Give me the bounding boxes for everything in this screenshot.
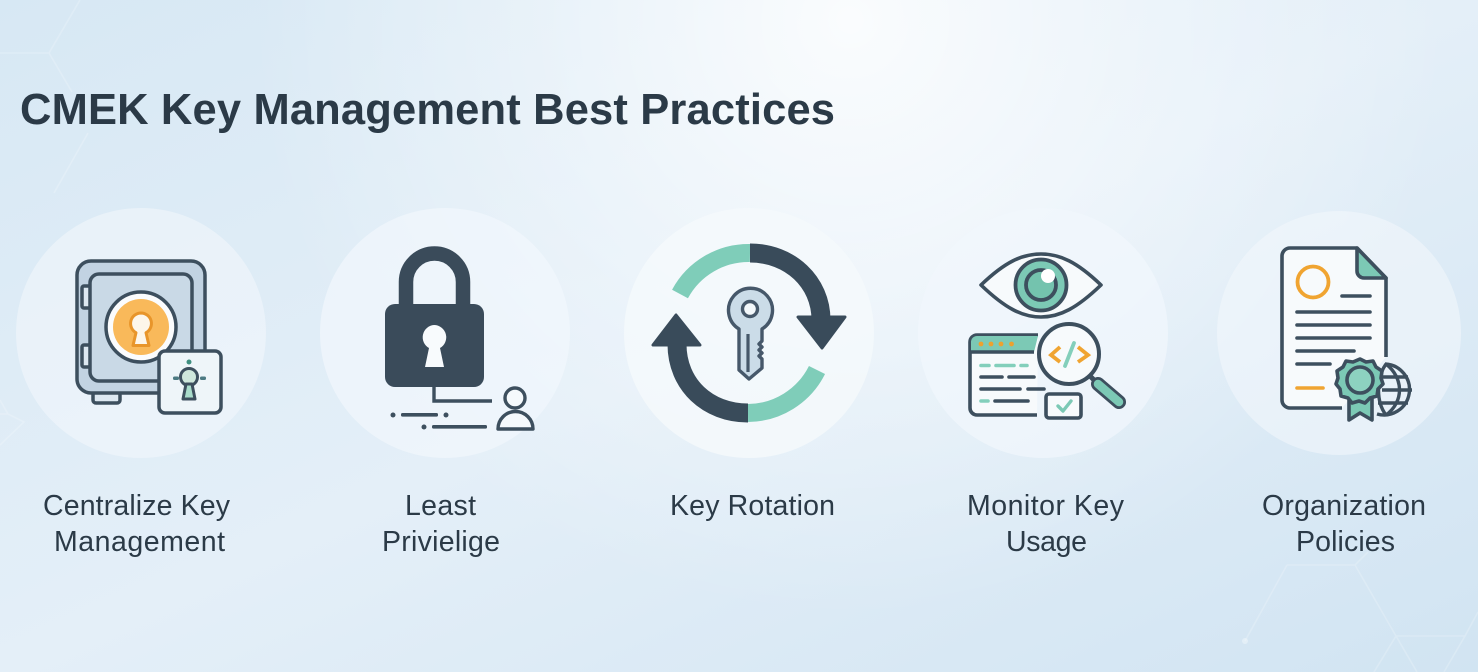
icon circle 3 — [624, 208, 874, 458]
icon: certificate badge — [1336, 359, 1383, 420]
icon: globe — [1377, 364, 1412, 415]
icon: safe with keyhole — [77, 261, 221, 413]
icon: rotation arrows with key — [653, 253, 845, 413]
icon: eye — [981, 254, 1101, 317]
panel: key rotation — [624, 208, 874, 522]
label — [967, 490, 1125, 558]
label: Least — [405, 490, 476, 522]
icon: code window — [970, 335, 1044, 415]
label: Privielige — [382, 526, 500, 558]
label: Management — [54, 526, 225, 558]
label: Centralize Key — [43, 490, 231, 522]
label: Key Rotation — [670, 490, 835, 522]
icon circle 5 — [1217, 211, 1461, 455]
label — [43, 490, 231, 558]
panel: centralize key management — [16, 208, 266, 558]
label: Policies — [1296, 526, 1395, 558]
icon circle 2 — [320, 208, 570, 458]
label: Monitor Key — [967, 490, 1125, 522]
icon: padlock with user — [385, 254, 533, 430]
panel: least privilege — [320, 208, 570, 558]
icon: check box — [1046, 394, 1081, 418]
icon circle 1 — [16, 208, 266, 458]
title: CMEK Key Management Best Practices — [20, 86, 835, 134]
icon detail: small key ticks — [173, 360, 206, 380]
icon circle 4 — [918, 208, 1168, 458]
label — [1262, 490, 1426, 558]
icon: magnifier with code — [1039, 324, 1119, 402]
label: Organization — [1262, 490, 1426, 522]
icon: policy document — [1282, 248, 1386, 408]
label — [382, 490, 500, 558]
panel: monitor key usage — [918, 208, 1168, 558]
panel: organization policies — [1217, 211, 1461, 558]
label: Usage — [1006, 526, 1087, 558]
